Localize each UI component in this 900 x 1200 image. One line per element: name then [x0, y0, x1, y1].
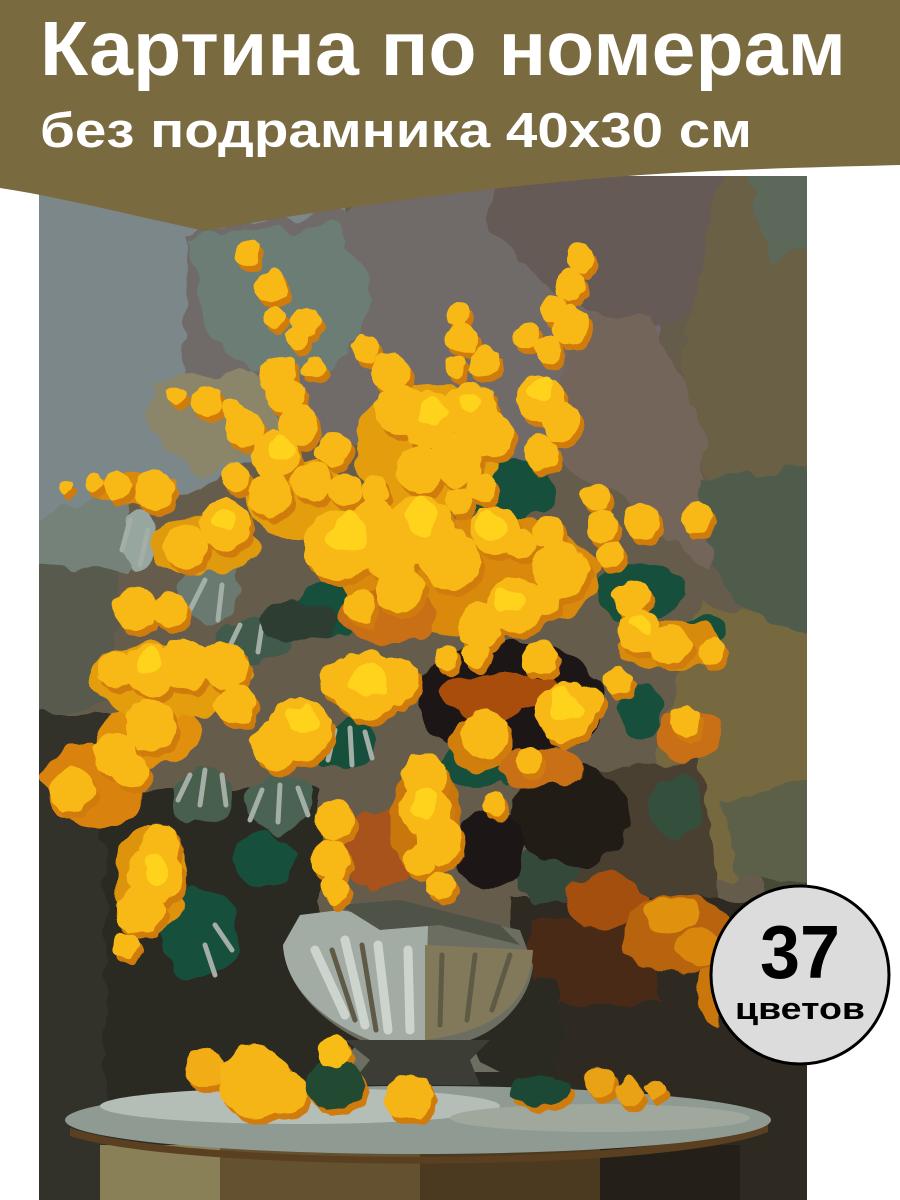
- fallen mimosa on table: [185, 1036, 664, 1120]
- title: Картина по номерам: [40, 6, 846, 92]
- painting background: [20, 160, 830, 1200]
- badge circle: [711, 886, 889, 1064]
- mimosa flowers: yellow blossoms: [50, 242, 725, 958]
- subtitle: без подрамника 40х30 см: [40, 104, 752, 158]
- foliage: [122, 458, 731, 980]
- badge label: цветов: [735, 991, 865, 1026]
- banner shape: [0, 0, 900, 231]
- orange undertone of flower masses: [45, 385, 730, 1027]
- bright flower highlights: [138, 378, 650, 884]
- vase: [283, 900, 533, 1085]
- header banner: [0, 0, 900, 231]
- badge number: 37: [760, 910, 840, 994]
- badge: 37 colours: [711, 886, 889, 1064]
- dark flower centre: [260, 600, 630, 890]
- leaf strokes: [122, 520, 372, 975]
- table: [65, 1086, 771, 1200]
- painting: mimosa bouquet in a vase: [20, 160, 830, 1200]
